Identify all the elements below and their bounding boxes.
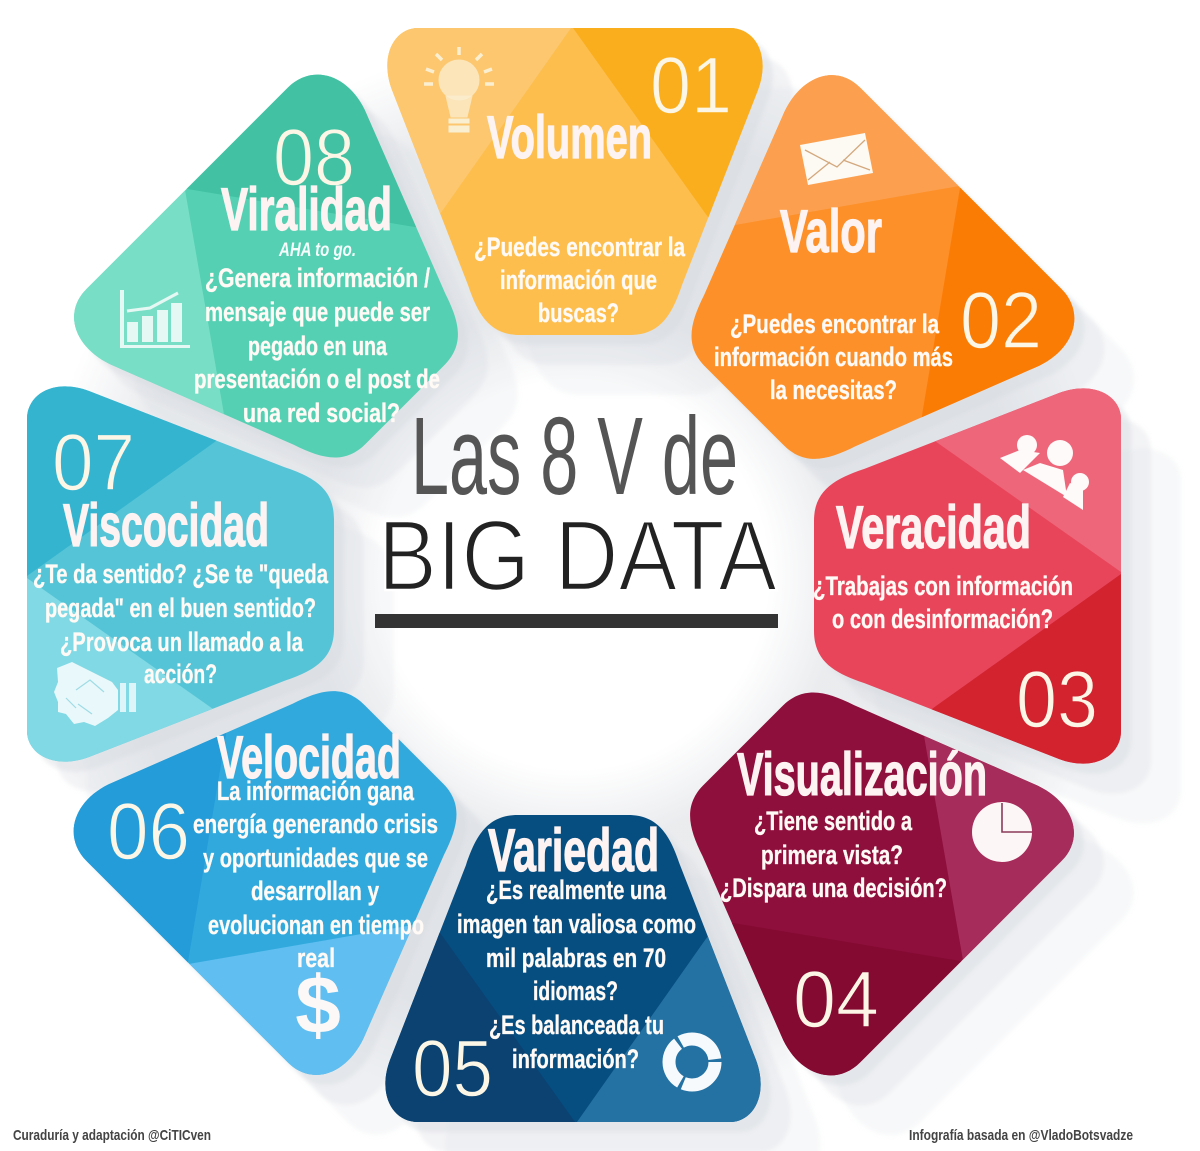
text block: evolucionan en tiempo (208, 910, 424, 940)
icon: envelope (800, 133, 873, 185)
petal shape (692, 75, 1074, 459)
text block: información cuando más (714, 342, 953, 372)
text block: pegada" en el buen sentido? (45, 593, 316, 623)
panel: 01 Volumen (387, 28, 763, 335)
text block: ¿Puedes encontrar la (474, 232, 686, 262)
text block: primera vista? (761, 840, 903, 870)
icon: handshake (54, 662, 136, 726)
heading: Veracidad: Veracidad (836, 494, 1031, 561)
text block: buscas? (538, 298, 619, 328)
panel: 04 Visualización (690, 692, 1074, 1076)
petal shape (814, 388, 1121, 764)
text block: ¿Es balanceada tu (489, 1010, 664, 1040)
panel: 08 Viralidad (74, 74, 458, 458)
text block: ¿Tiene sentido a (754, 806, 913, 836)
text block: ¿Trabajas con información (813, 571, 1073, 601)
heading: Variedad: Variedad (488, 817, 659, 884)
text block: ¿Es realmente una (486, 875, 667, 905)
text block: real (297, 943, 335, 973)
petal shape (27, 386, 334, 762)
title: Las 8 V de: Las 8 V de (411, 395, 738, 518)
number 06: 06 (107, 787, 190, 877)
text block: información que (500, 265, 657, 295)
footer credit right: Infografía basada en @VladoBotsvadze (909, 1127, 1133, 1144)
text block: desarrollan y (251, 876, 379, 906)
petal shape (387, 28, 763, 335)
petal shape (690, 692, 1074, 1076)
heading: Velocidad: Velocidad (217, 724, 401, 791)
heading: Viscocidad: Viscocidad (63, 492, 269, 559)
title underline (375, 614, 778, 628)
title: BIG DATA: BIG DATA (378, 500, 777, 612)
number 02: 02 (960, 276, 1042, 366)
footer credit left: Curaduría y adaptación @CiTICven (13, 1127, 211, 1144)
text block: presentación o el post de (194, 364, 440, 394)
icon: cycle arrows (669, 1039, 715, 1085)
number 04: 04 (793, 955, 879, 1045)
text block: y oportunidades que se (203, 843, 428, 873)
text block: una red social? (243, 398, 400, 428)
text block (457, 875, 696, 1074)
panel: 02 Valor (692, 75, 1074, 459)
text block: ¿Dispara una decisión? (720, 873, 947, 903)
heading: Volumen: Volumen (487, 104, 652, 171)
text block: ¿Genera información / (205, 263, 430, 293)
icon: bar chart (120, 290, 190, 348)
text block (474, 232, 686, 328)
number 08: 08 (273, 113, 355, 203)
text block: ¿Te da sentido? ¿Se te "queda (33, 559, 329, 589)
icon: dollar sign: $ (295, 960, 341, 1051)
icon: pie chart (972, 802, 1032, 862)
heading: Viralidad: Viralidad (221, 176, 392, 243)
panel: 05 Variedad (385, 815, 761, 1122)
petal shape (74, 691, 456, 1075)
text block: información? (512, 1044, 639, 1074)
heading: Valor: Valor (780, 198, 882, 265)
text block: la necesitas? (770, 375, 897, 405)
text block (720, 806, 947, 903)
number 07: 07 (52, 418, 135, 508)
text block: mensaje que puede ser (205, 297, 430, 327)
text block (714, 309, 953, 405)
text block: ¿Provoca un llamado a la (60, 627, 304, 657)
number 01: 01 (650, 41, 732, 131)
text block: pegado en una (248, 331, 388, 361)
text block: ¿Puedes encontrar la (730, 309, 940, 339)
text block: acción? (144, 659, 217, 689)
text block: idiomas? (533, 976, 618, 1006)
text block: imagen tan valiosa como (457, 909, 696, 939)
petal shape (385, 815, 761, 1122)
text block (193, 776, 438, 973)
panel: 07 Viscocidad (0, 349, 359, 799)
tagline: AHA to go. (278, 240, 356, 261)
text block (813, 571, 1073, 634)
text block: La información gana (217, 776, 415, 806)
text block (194, 263, 440, 428)
panel: 03 Veracidad (814, 388, 1121, 764)
petal shape (74, 74, 458, 458)
text block: mil palabras en 70 (486, 943, 666, 973)
panel: 06 Velocidad (74, 691, 456, 1075)
icon: people (1000, 435, 1089, 510)
icon: light bulb (424, 47, 494, 132)
number 05: 05 (412, 1024, 493, 1114)
text block: o con desinformación? (832, 604, 1053, 634)
heading: Visualización: Visualización (737, 741, 987, 808)
text block (33, 559, 329, 689)
number 03: 03 (1016, 655, 1098, 745)
text block: energía generando crisis (193, 809, 438, 839)
